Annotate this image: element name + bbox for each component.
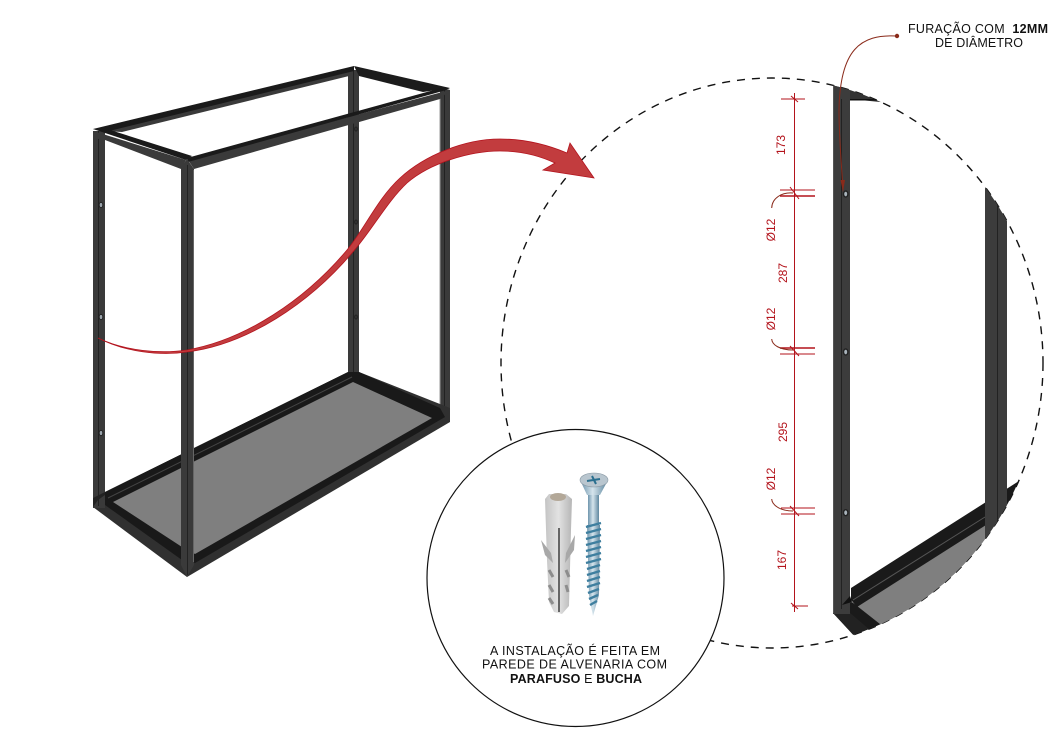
front post xyxy=(181,159,194,577)
base shelf xyxy=(93,372,450,577)
installation caption: PAREDE DE ALVENARIA COM xyxy=(482,658,667,672)
icon: screw xyxy=(580,473,608,616)
dashed detail circle xyxy=(501,78,1043,648)
dimension labels xyxy=(764,135,790,570)
dimension labels: Ø12 xyxy=(764,218,778,241)
detail holes xyxy=(844,191,848,516)
installation caption: PARAFUSO E BUCHA xyxy=(510,672,642,686)
right post detail xyxy=(985,170,1007,550)
dimension lines xyxy=(772,93,815,612)
hole label: DE DIÂMETRO xyxy=(935,35,1023,50)
dimension labels: Ø12 xyxy=(764,467,778,490)
metal frame isometric view xyxy=(93,66,450,577)
hole label xyxy=(908,22,1048,50)
icon: wall plug xyxy=(541,493,575,614)
top rail section xyxy=(834,86,882,102)
left post xyxy=(93,131,105,508)
screw holes xyxy=(99,127,357,436)
installation circle xyxy=(427,430,724,726)
dimension labels: Ø12 xyxy=(764,307,778,330)
back posts xyxy=(348,70,450,422)
installation caption: A INSTALAÇÃO É FEITA EM xyxy=(490,643,660,658)
dimension labels: 167 xyxy=(775,550,789,570)
hole leader line xyxy=(839,34,899,192)
red curved arrow xyxy=(98,139,594,353)
hole label: FURAÇÃO COM 12MM xyxy=(908,22,1048,36)
installation caption xyxy=(482,643,667,686)
bottom shelf section xyxy=(834,482,1018,635)
top rails xyxy=(93,66,450,169)
left post detail xyxy=(833,80,850,614)
dimension labels: 173 xyxy=(774,135,788,155)
dimension labels: 295 xyxy=(776,422,790,442)
dimension labels: 287 xyxy=(776,263,790,283)
detail view of frame xyxy=(833,80,1030,640)
